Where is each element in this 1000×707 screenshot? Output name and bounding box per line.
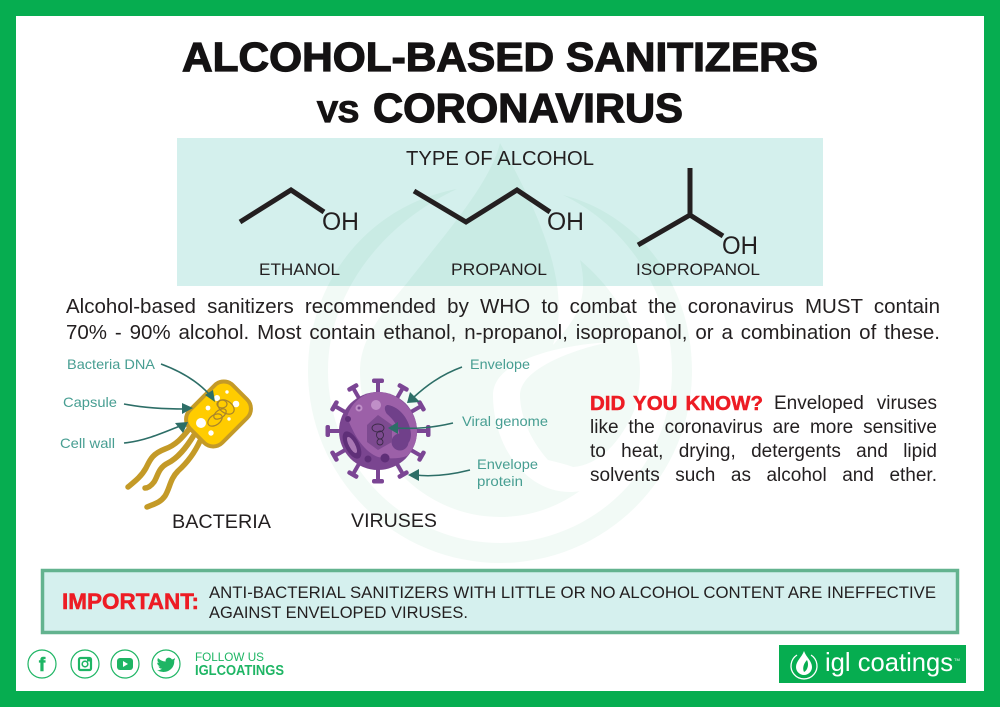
follow us text: FOLLOW US (195, 650, 264, 664)
logo: igl coatings: igl coatings (825, 647, 953, 677)
follow us text: IGLCOATINGS (195, 663, 284, 679)
icon: youtube (111, 650, 139, 678)
text block: did you know (590, 392, 937, 486)
title: ALCOHOL-BASED SANITIZERS (182, 34, 818, 80)
bacteria DNA (206, 397, 237, 429)
labels: bacteria parts (60, 356, 156, 451)
title: VS (317, 96, 359, 129)
panel: type of alcohol background (177, 138, 823, 286)
diagram: bacteria (128, 376, 256, 507)
text block: intro paragraph: Alcohol-based sanitizers recommended by WHO to combat the coronavirus MUST contain (66, 295, 940, 318)
labels: bacteria parts: Bacteria DNA (67, 356, 156, 372)
molecule: propanol: OH (547, 208, 584, 236)
virus organelles (339, 400, 411, 462)
text block: intro paragraph: 70% - 90% alcohol. Most contain ethanol, n-propanol, isopropanol, or a combination of these. (66, 321, 940, 344)
bacteria tails (128, 428, 200, 507)
virus spikes (326, 378, 430, 484)
viral genome (372, 424, 384, 445)
icon: instagram (71, 650, 99, 678)
logo: igl coatings (779, 645, 966, 683)
icon: facebook (28, 650, 56, 678)
labels: bacteria parts: Cell wall (60, 435, 115, 451)
label: bacteria: BACTERIA (172, 511, 271, 533)
labels: virus parts: Viral genome (462, 413, 548, 429)
arrow: envelope protein (408, 469, 470, 481)
watermark logo (308, 143, 692, 563)
arrow: viral genome (388, 422, 453, 434)
diagram: virus (326, 378, 430, 484)
title (182, 34, 818, 131)
text block: did you know: DID YOU KNOW? (590, 392, 763, 415)
important message: AGAINST ENVELOPED VIRUSES. (209, 604, 468, 622)
icon: twitter (152, 650, 180, 678)
molecule: ethanol (240, 190, 359, 279)
molecule: isopropanol: OH (722, 232, 758, 260)
text block: did you know: Enveloped viruses (774, 393, 937, 414)
text block: did you know: to heat, drying, detergents and lipid (590, 441, 937, 462)
labels: virus parts: Envelope (470, 356, 530, 372)
follow us text (195, 650, 284, 679)
virus envelope (339, 392, 417, 470)
molecule: isopropanol (636, 168, 760, 279)
icon: facebook: f (39, 655, 46, 676)
arrow: envelope (407, 367, 462, 403)
molecule: propanol (414, 190, 584, 279)
molecule: ethanol: OH (322, 208, 359, 236)
labels: bacteria parts: Capsule (63, 394, 117, 410)
text block: intro paragraph (66, 295, 940, 344)
bacteria spots (196, 390, 239, 436)
arrow: cell wall (124, 422, 188, 443)
text block: did you know: solvents such as alcohol and ether. (590, 465, 937, 486)
important message (209, 584, 936, 622)
panel: important (42, 570, 958, 632)
important label: IMPORTANT: (62, 589, 199, 614)
logo icon (791, 651, 817, 679)
bacteria body (181, 376, 256, 452)
text block: did you know: like the coronavirus are more sensitive (590, 417, 937, 438)
arrow: bacteria DNA (161, 364, 215, 402)
label: viruses: VIRUSES (351, 510, 437, 532)
molecule: ethanol: ETHANOL (259, 261, 340, 279)
molecule: isopropanol: ISOPROPANOL (636, 261, 760, 279)
logo: igl coatings: TM (954, 657, 960, 662)
labels: virus parts: protein (477, 473, 523, 489)
arrow: capsule (124, 403, 193, 414)
title: CORONAVIRUS (373, 85, 683, 131)
important message: ANTI-BACTERIAL SANITIZERS WITH LITTLE OR NO ALCOHOL CONTENT ARE INEFFECTIVE (209, 584, 936, 602)
labels: virus parts: Envelope (477, 456, 538, 472)
heading: type of alcohol: TYPE OF ALCOHOL (406, 148, 594, 170)
labels: virus parts (462, 356, 548, 489)
molecule: propanol: PROPANOL (451, 261, 547, 279)
